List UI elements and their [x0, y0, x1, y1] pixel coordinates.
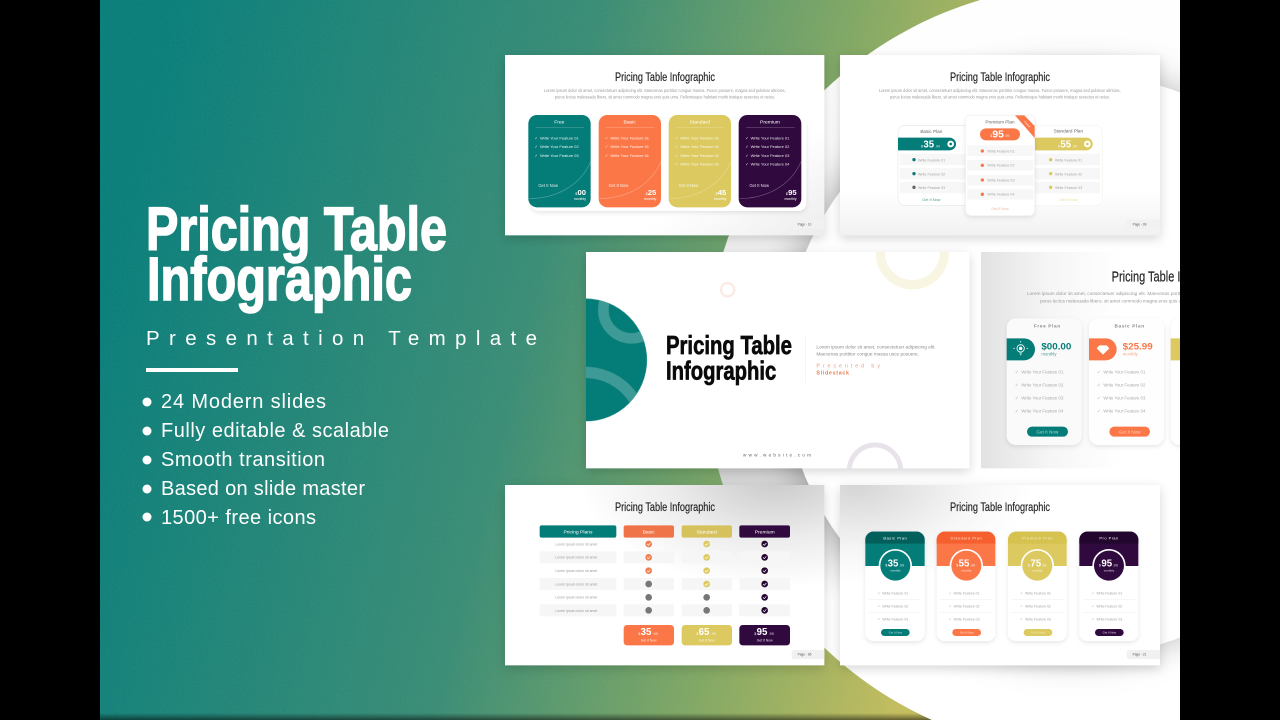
feature bullet list: 1500+ free icons: [161, 507, 316, 529]
card: Premium Plan: [966, 115, 1035, 216]
card: Premium Plan: ✓: [1020, 617, 1023, 621]
card: Free Plan: ✓: [1015, 369, 1019, 374]
cover title: Infographic: [666, 355, 776, 385]
card: Premium: Write Your Feature 01: [751, 135, 790, 140]
card: Standard Plan: ✓: [949, 591, 952, 595]
card: Premium Plan: Write Feature 02: [1025, 604, 1051, 608]
feature bullet list: [142, 391, 389, 529]
card: Basic: Write Your Feature 01: [610, 144, 650, 149]
icons: basic column checks: [645, 541, 652, 614]
price box: Basic: [624, 625, 674, 645]
card: Pro Plan: ✓: [1091, 591, 1094, 595]
price box: Standard: .99: [711, 632, 716, 636]
panel: slide 6, header cards with round prices: [840, 485, 1160, 665]
card: Premium: monthly: [784, 197, 797, 201]
card: Pro Plan: .99: [1113, 564, 1118, 568]
row labels: Lorem ipsum dolor sit amet: [555, 609, 597, 613]
card: Standard: ✓: [675, 153, 678, 158]
card: Free: Write Your Feature 02: [540, 144, 579, 149]
panel: slide 1, four colored pricing cards: [505, 55, 824, 235]
ribbon: Popular: [1023, 120, 1031, 128]
card: Standard: Standard: [690, 119, 710, 125]
icon: diamond: [1097, 345, 1109, 355]
card: Premium: Write Your Feature 04: [751, 162, 790, 167]
card: Premium Plan: [1008, 532, 1067, 641]
price box: Premium: 95: [757, 627, 768, 638]
slide 1 heading: Pricing Table Infographic: [615, 70, 715, 84]
card: Standard: Write Your Feature 01: [680, 135, 720, 140]
panel: slide 2, overlapping pricing cards: [840, 55, 1160, 235]
card: Standard: ✓: [675, 162, 678, 167]
feature bullet list: Based on slide master: [161, 478, 365, 500]
card: Basic Plan: [1089, 318, 1164, 445]
card: Basic: $: [646, 192, 648, 196]
card: Basic Plan: $: [885, 564, 887, 568]
card: Free: ✓: [535, 135, 538, 140]
card: Premium: Write Your Feature 03: [751, 153, 790, 158]
card: Standard Plan: $: [956, 564, 958, 568]
row labels: Lorem ipsum dolor sit amet: [555, 582, 597, 586]
presenter credit: Slidestack: [816, 371, 849, 377]
card: Pro Plan: monthly: [1104, 568, 1115, 572]
slide 6 heading: Pricing Table Infographic: [950, 500, 1050, 514]
card: Premium Plan: Write Feature 01: [987, 149, 1015, 153]
card: Basic: Get It Now: [609, 183, 629, 188]
card: Standard: $: [716, 192, 718, 196]
card: Basic Plan: Write Feature 01: [882, 591, 908, 595]
main title: [146, 195, 447, 313]
panel: slide 4, plan cards with icons: [981, 252, 1280, 468]
slide 2 intro text: purus lectus malesuada libero, sit amet commodo magna eros quis urna. Pellentesque habitant morbi tristique senectus et netus.: [890, 95, 1110, 100]
card: Free Plan: Write Your Feature 03: [1021, 396, 1064, 401]
page tag: Page - 09: [1133, 222, 1147, 226]
card: Pro Plan: ✓: [1091, 604, 1094, 608]
card: Premium Plan: 75: [1030, 559, 1042, 570]
card: Standard: ✓: [675, 135, 678, 140]
check marks: [647, 543, 766, 612]
row labels: Lorem ipsum dolor sit amet: [555, 569, 597, 573]
card: Standard Plan: .99: [1072, 144, 1077, 148]
card: Basic Plan: 35: [888, 559, 899, 570]
card: Premium Plan: Write Feature 04: [987, 193, 1015, 197]
card: Standard: monthly: [714, 197, 727, 201]
card: Pro Plan: Write Feature 01: [1096, 591, 1122, 595]
slide 4 intro text: purus lectus malesuada libero, sit amet commodo magna eros quis urna. Pellentesque habitant morbi tristique senectus et netus.: [1040, 298, 1280, 303]
slide 4 intro text: [1027, 291, 1280, 303]
card: Basic Plan: ✓: [1097, 409, 1101, 414]
price box: Basic: $: [638, 632, 640, 636]
card: Standard: Get It Now: [679, 183, 699, 188]
card: Basic Plan: 35: [923, 139, 935, 150]
card: Pro Plan: Pro Plan: [1099, 536, 1119, 541]
card: Premium Plan: .99: [1041, 564, 1046, 568]
card: Standard Plan: Write Feature 01: [954, 591, 980, 595]
card: Premium: Write Your Feature 02: [751, 144, 790, 149]
left black side bar: [0, 0, 100, 720]
card: Pro Plan: [1079, 532, 1138, 641]
price box: Premium: .99: [769, 632, 774, 636]
page tag: Page - 10: [798, 222, 812, 226]
card: Standard: Write Your Feature 01: [680, 153, 720, 158]
card: Standard: Write Your Feature 01: [680, 144, 720, 149]
slide 4 heading: Pricing Table Infographic: [1112, 270, 1232, 286]
card: Free: [528, 115, 591, 207]
price box: Standard: 65: [699, 627, 710, 638]
card: Free Plan: Write Your Feature 02: [1021, 382, 1064, 387]
card: Basic Plan: Write Feature 03: [882, 617, 908, 621]
card: Basic Plan: ✓: [877, 591, 880, 595]
card: Pro Plan: ✓: [1091, 617, 1094, 621]
card: Free Plan: ✓: [1015, 409, 1019, 414]
price box: Premium: $: [754, 632, 756, 636]
card: Free: ✓: [535, 153, 538, 158]
cover title: [666, 330, 792, 385]
cover description: [816, 344, 936, 357]
card: Basic Plan: $25.99: [1123, 341, 1153, 351]
teal half circle with arcs: [586, 298, 648, 422]
card: Free Plan: $00.00: [1041, 341, 1071, 351]
presenter credit: Presented by: [816, 364, 880, 370]
card: Basic: monthly: [644, 197, 657, 201]
card: Standard: ✓: [675, 144, 678, 149]
feature bullet list: Fully editable & scalable: [161, 420, 389, 442]
card: Premium Plan: 95: [992, 129, 1004, 140]
card: Free: Write Your Feature 01: [540, 135, 579, 140]
card: Pro Plan: Get It Now: [1103, 631, 1117, 635]
card: Free Plan: ✓: [1015, 396, 1019, 401]
subtitle: Presentation Template: [146, 327, 537, 350]
card: Standard Plan: monthly: [961, 568, 972, 572]
table header row: Basic: [643, 529, 655, 535]
card: Free: monthly: [574, 197, 586, 201]
card: Premium Plan: Write Feature 01: [1025, 591, 1051, 595]
price box: Premium: Get It Now: [757, 639, 773, 643]
card: Standard: [669, 115, 731, 207]
page tag: Page - 21: [1133, 653, 1147, 657]
card: Free: Write Your Feature 03: [540, 153, 579, 158]
price box: Standard: Get It Now: [699, 639, 715, 643]
large white background circle: [705, 0, 1280, 720]
card: third plan, cut off: [1171, 318, 1246, 445]
card: Premium Plan: $: [990, 134, 992, 138]
card: Basic: Basic: [624, 119, 636, 125]
card: Premium Plan: monthly: [1032, 568, 1043, 572]
card: Basic Plan: Write Your Feature 01: [1103, 369, 1146, 374]
card: Standard Plan: 55: [959, 559, 970, 570]
price box: Basic: 35: [641, 627, 652, 638]
card: Free Plan: Write Your Feature 01: [1021, 369, 1064, 374]
card: Basic: ✓: [605, 153, 608, 158]
card: Standard Plan: Write Feature 03: [954, 617, 980, 621]
card: Premium: [739, 115, 801, 207]
card: Basic Plan: ✓: [877, 604, 880, 608]
card: Standard Plan: Get It Now: [1059, 198, 1078, 202]
table row bands: [540, 551, 790, 616]
card: Basic Plan: Get It Now: [889, 631, 903, 635]
slide 5 heading: Pricing Table Infographic: [615, 500, 715, 514]
card: Basic: Write Your Feature 01: [610, 135, 650, 140]
card: Standard Plan: 55: [1060, 139, 1072, 150]
card: Premium: Premium: [760, 119, 780, 125]
card: Pro Plan: Write Feature 03: [1096, 617, 1122, 621]
card: Basic Plan: .99: [899, 564, 904, 568]
card: Basic: ✓: [605, 135, 608, 140]
card: Standard Plan: Write Feature 02: [954, 604, 980, 608]
card: Premium Plan: $: [1028, 564, 1030, 568]
card: Premium Plan: .99: [1004, 134, 1009, 138]
card: Premium: $: [786, 192, 788, 196]
card: Free Plan: Free Plan: [1034, 323, 1061, 328]
panel: slide 3, cover slide: [584, 251, 974, 476]
card: Standard Plan: Write Feature 02: [1055, 172, 1082, 176]
card backing plate: [531, 119, 806, 211]
card: Basic Plan: Get It Now: [922, 198, 941, 202]
title divider: [146, 368, 238, 372]
card: Basic Plan: [865, 532, 925, 641]
card: Free Plan: Get It Now: [1036, 429, 1059, 434]
card: Premium: ✓: [745, 135, 749, 140]
decorative rings: [721, 221, 944, 496]
card: Pro Plan: $: [1099, 564, 1101, 568]
card: Basic Plan: Basic Plan: [883, 536, 907, 541]
card: Standard Plan: $: [1058, 144, 1060, 148]
card: Basic Plan: Write Feature 02: [918, 172, 945, 176]
icon: light bulb: [1013, 341, 1028, 355]
card: Basic Plan: monthly: [1123, 352, 1139, 357]
price box: Premium: [739, 625, 790, 645]
slide 1 intro text: [544, 88, 786, 100]
feature bullet list: Smooth transition: [161, 449, 325, 471]
right black side bar: [1180, 0, 1280, 720]
card: Basic Plan: Get It Now: [1119, 429, 1141, 434]
card: Basic Plan: .99: [935, 144, 940, 148]
table header row: [540, 525, 790, 538]
card: Pro Plan: 95: [1101, 559, 1113, 570]
row labels: [555, 542, 597, 613]
card: Basic Plan: Write Feature 01: [918, 158, 945, 162]
slide 2 heading: Pricing Table Infographic: [950, 70, 1050, 84]
presenter credit: [816, 364, 880, 374]
card: Basic Plan: Write Your Feature 04: [1103, 409, 1146, 414]
card: Standard: Write Your Feature 01: [680, 162, 720, 167]
card: Premium Plan: Get It Now: [991, 207, 1009, 211]
card: Basic Plan: ✓: [1097, 382, 1101, 387]
card: Standard: 45: [718, 188, 727, 197]
card: Premium Plan: ✓: [1020, 604, 1023, 608]
page tag: Page - 06: [798, 653, 812, 657]
row labels: Lorem ipsum dolor sit amet: [555, 596, 597, 600]
page tag: [1127, 220, 1160, 229]
card: Free Plan: [1007, 318, 1082, 445]
card: Premium Plan: Write Feature 03: [1025, 617, 1051, 621]
card: Basic Plan: ✓: [1097, 396, 1101, 401]
icons: premium column checks: [761, 541, 768, 614]
page tag: [1127, 650, 1160, 659]
panel: slide 5, comparison table: [505, 485, 824, 665]
card: Standard Plan: Standard Plan: [1054, 129, 1083, 134]
cover description: Maecenas porttitor congue massa usce posuere.: [816, 352, 919, 357]
feature bullet list: 24 Modern slides: [161, 391, 326, 413]
card: Free Plan: Write Your Feature 04: [1021, 409, 1064, 414]
table header row: Standard: [697, 529, 717, 535]
card: Basic Plan: Write Your Feature 03: [1103, 396, 1146, 401]
card: Basic Plan: Write Feature 03: [918, 186, 945, 190]
card: Free: 00: [577, 188, 586, 197]
card: Standard Plan: ✓: [949, 604, 952, 608]
card: Premium Plan: ✓: [1020, 591, 1023, 595]
card: Standard Plan: .99: [970, 564, 975, 568]
card: Free Plan: ✓: [1015, 382, 1019, 387]
card: Free Plan: monthly: [1041, 352, 1057, 357]
price box: Standard: [682, 625, 732, 645]
card: Premium Plan: Premium Plan: [1022, 536, 1053, 541]
card: Basic Plan: monthly: [890, 568, 901, 572]
card: Premium: ✓: [745, 144, 749, 149]
page tag: [792, 650, 824, 659]
table header row: Pricing Plans: [563, 529, 593, 535]
card: Free: ✓: [535, 144, 538, 149]
card: Standard Plan: Standard Plan: [950, 536, 982, 541]
slide 1 intro text: Lorem ipsum dolor sit amet, consectetuer adipiscing elit. Maecenas porttitor congue massa. Fusce posuere, magna sed pulvinar ultricies,: [544, 88, 786, 93]
main title: Infographic: [147, 245, 412, 313]
card: Basic Plan: Write Your Feature 02: [1103, 382, 1146, 387]
card: Premium Plan: Write Feature 03: [987, 178, 1015, 182]
card: Basic Plan: Basic Plan: [1115, 323, 1145, 328]
card: Standard Plan: Get It Now: [960, 631, 974, 635]
icons: standard column checks: [703, 541, 710, 614]
card: Pro Plan: Write Feature 02: [1096, 604, 1122, 608]
main title: Pricing Table: [146, 195, 447, 263]
card: Free: Get It Now: [538, 183, 559, 188]
price box: Basic: Get It Now: [641, 639, 657, 643]
card: Premium: 95: [788, 188, 797, 197]
card: Free: $: [575, 192, 577, 196]
card: Basic: Write Your Feature 01: [610, 153, 650, 158]
divider: [804, 336, 807, 383]
table header row: Premium: [755, 529, 775, 535]
card: Standard Plan: Write Feature 03: [1055, 186, 1082, 190]
cover title: Pricing Table: [666, 330, 792, 360]
card: Basic Plan: [898, 125, 978, 206]
card: Basic: [599, 115, 661, 207]
row labels: Lorem ipsum dolor sit amet: [555, 556, 597, 560]
page tag: [792, 220, 824, 229]
slide 1 intro text: purus lectus malesuada libero, sit amet commodo magna eros quis urna. Pellentesque habitant morbi tristique senectus et netus.: [555, 95, 775, 100]
card: Premium Plan: Premium Plan: [985, 119, 1015, 124]
card: Standard Plan: [1020, 125, 1103, 206]
card: Basic Plan: $: [921, 144, 923, 148]
row labels: Lorem ipsum dolor sit amet: [555, 542, 597, 546]
card: Standard Plan: ✓: [949, 617, 952, 621]
price box: Basic: .99: [653, 632, 658, 636]
slide 2 intro text: [879, 88, 1121, 100]
card: Basic Plan: ✓: [1097, 369, 1101, 374]
card: Premium: ✓: [745, 153, 749, 158]
card: Basic Plan: ✓: [877, 617, 880, 621]
card: Basic Plan: Basic Plan: [920, 129, 943, 134]
card: Premium: Get It Now: [749, 183, 770, 188]
card: Premium Plan: Write Feature 02: [987, 164, 1015, 168]
card: Basic Plan: Write Feature 02: [882, 604, 908, 608]
card: Standard Plan: [937, 532, 995, 641]
card: Basic: 25: [648, 188, 657, 197]
card: Premium Plan: Get It Now: [1031, 631, 1046, 635]
card: Basic: ✓: [605, 144, 608, 149]
slide 2 intro text: Lorem ipsum dolor sit amet, consectetuer adipiscing elit. Maecenas porttitor congue massa. Fusce posuere, magna sed pulvinar ultricies,: [879, 88, 1121, 93]
card: Premium: ✓: [745, 162, 749, 167]
website: www.website.com: [743, 453, 811, 458]
card: Free: Free: [554, 119, 565, 125]
card: Standard Plan: Write Feature 01: [1055, 158, 1082, 162]
price box: Standard: $: [696, 632, 698, 636]
cover description: Lorem ipsum dolor sit amet, consectetuer adipiscing elit.: [816, 344, 936, 349]
